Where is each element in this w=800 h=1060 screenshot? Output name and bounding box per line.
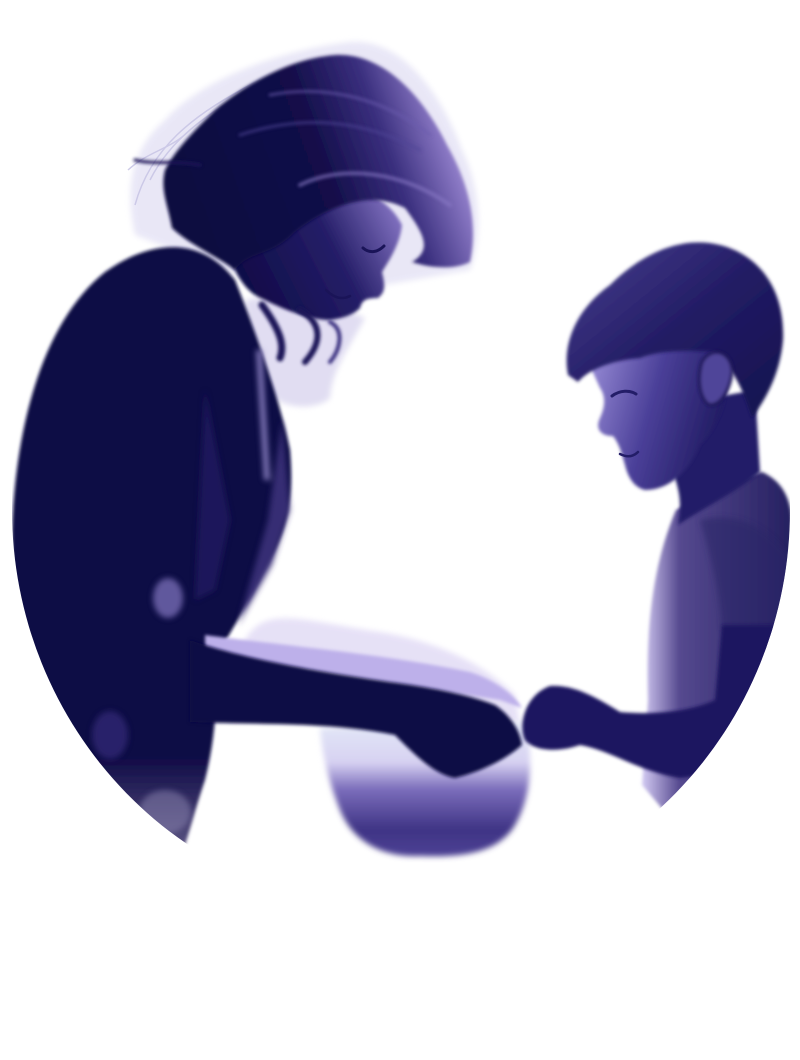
woman eye and mouth bbox=[326, 246, 384, 298]
woman hair strands bbox=[135, 91, 450, 362]
boy ear bbox=[700, 352, 732, 405]
boy face bbox=[585, 335, 727, 490]
boy hair bbox=[567, 242, 783, 418]
boy shirt bbox=[642, 472, 792, 812]
woman far arm glow bbox=[245, 618, 520, 725]
woman hair bbox=[163, 55, 473, 270]
boy eye and mouth bbox=[612, 391, 638, 456]
boy neck bbox=[672, 390, 760, 525]
woman near arm highlight bbox=[205, 635, 522, 708]
woman hair halo bbox=[128, 42, 478, 300]
woman torso bbox=[12, 247, 291, 845]
bowl bbox=[320, 722, 530, 856]
woman lower hair wisps bbox=[245, 290, 365, 407]
woman near arm and hand bbox=[190, 640, 522, 778]
boy shirt sleeve seam bbox=[700, 517, 792, 630]
illustration: woman and boy over a bowl bbox=[12, 42, 792, 856]
woman dress fold highlights bbox=[92, 350, 290, 834]
woman neck and face bbox=[232, 186, 402, 320]
boy arm and hand bbox=[522, 625, 790, 778]
